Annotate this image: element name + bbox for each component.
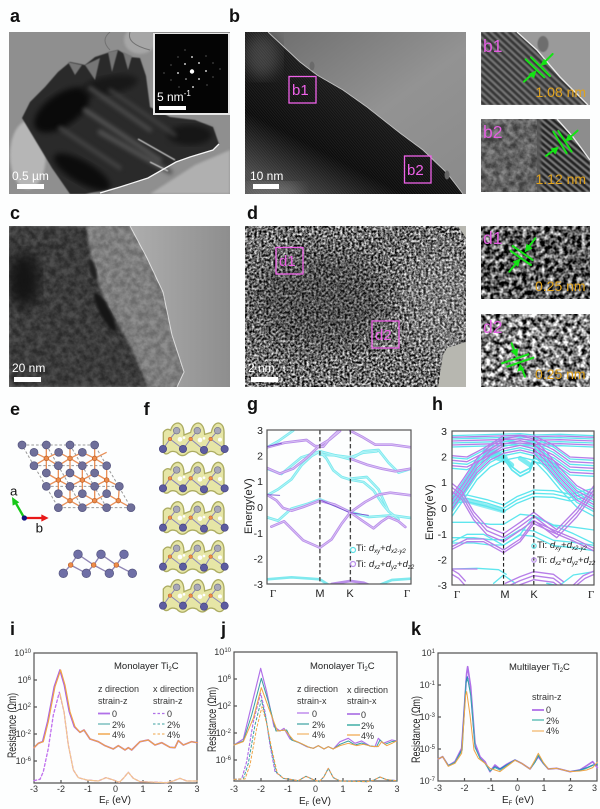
y ticks k: 10 <box>420 680 430 690</box>
x axis label i: E <box>99 795 106 806</box>
orbital legend h: + <box>561 555 567 566</box>
label b1: b1 <box>483 36 502 56</box>
spacing d2: 0.25 nm <box>535 366 586 382</box>
legend k: 2% <box>546 716 559 726</box>
inset b1: lattice fringes <box>481 32 590 105</box>
band plot g <box>268 430 410 584</box>
y ticks j: 2 <box>228 702 232 708</box>
x ticks j: -1 <box>284 784 292 794</box>
y ticks k <box>420 648 436 786</box>
y ticks k: 10 <box>420 712 430 722</box>
y ticks i: 6 <box>28 676 32 682</box>
orbital legend g: Ti: d <box>356 559 374 570</box>
x axis label j: F <box>306 802 310 808</box>
orbital legend g: yz <box>390 565 397 571</box>
x axis label j: E <box>299 796 306 807</box>
energy ticks g: 0 <box>257 502 263 514</box>
inset d1: lattice <box>481 226 590 299</box>
inset scale label: -1 <box>184 89 191 98</box>
y ticks j: 10 <box>224 648 232 654</box>
panel d: high-resolution TEM image <box>245 203 485 387</box>
green fringe marker d1 <box>509 238 535 272</box>
legend k <box>532 692 562 736</box>
x ticks k <box>434 783 597 793</box>
x ticks j: 3 <box>394 784 400 794</box>
x ticks j: -3 <box>230 784 238 794</box>
legend i: 2% <box>167 720 180 730</box>
panel g: monolayer band structure <box>243 394 415 600</box>
orbital legend g: x2-y2 <box>390 549 406 555</box>
y ticks k: -3 <box>430 713 436 719</box>
y axis label i: Resistance (Ωm) <box>5 693 19 758</box>
panel j: resistance monolayer strain-x <box>205 619 400 808</box>
band plot h <box>452 432 594 584</box>
x ticks k: 3 <box>592 783 597 793</box>
x ticks k: -2 <box>460 783 469 793</box>
orbital legend g <box>350 543 415 571</box>
legend i: x direction <box>153 684 194 694</box>
x ticks k: 2 <box>568 783 573 793</box>
region box b1: b1 <box>292 82 309 99</box>
y ticks i: 10 <box>18 702 28 712</box>
panel c: TEM image edge <box>8 203 230 387</box>
energy ticks g <box>254 425 263 591</box>
x ticks i: 2 <box>167 784 173 794</box>
region box b1 <box>289 76 316 103</box>
heading h: h <box>432 394 443 414</box>
title k: Multilayer Ti <box>509 662 560 673</box>
y ticks i: -2 <box>26 730 32 736</box>
x axis label i: (eV) <box>109 795 131 806</box>
label b2: b2 <box>483 122 502 142</box>
x ticks j <box>230 784 400 794</box>
orbital legend h: d <box>567 540 573 551</box>
heading b: b <box>229 6 240 26</box>
y ticks i: 10 <box>14 648 24 658</box>
legend j: 0 <box>312 709 317 719</box>
legend i <box>98 684 194 740</box>
k-path labels h: M <box>500 589 510 601</box>
y ticks k: -5 <box>430 745 436 751</box>
legend i: z direction <box>98 684 139 694</box>
y ticks k: -1 <box>430 681 436 687</box>
scale bar a <box>17 184 44 189</box>
region box b2 <box>404 156 431 183</box>
k-path labels h <box>454 589 594 601</box>
heading f: f <box>144 399 151 419</box>
orbital legend g: d <box>386 559 392 570</box>
y ticks j: 10 <box>218 701 228 711</box>
inset scale label: 5 nm <box>157 90 184 104</box>
energy ticks g: -1 <box>254 528 263 540</box>
x axis label k: F <box>509 801 513 807</box>
curves k <box>438 667 597 772</box>
orbital legend g: z2 <box>407 565 415 571</box>
y ticks k: 10 <box>420 744 430 754</box>
x ticks j: 0 <box>313 784 318 794</box>
axes arrows a and b: a <box>10 484 18 499</box>
legend j: 2% <box>361 721 374 731</box>
energy ticks h: 1 <box>441 477 447 489</box>
energy ticks g: 2 <box>257 450 263 462</box>
energy ticks g: -3 <box>254 579 263 591</box>
x ticks i <box>30 784 200 794</box>
top view lattice <box>18 441 135 512</box>
orbital legend h <box>532 540 596 567</box>
energy ticks g: -2 <box>254 554 263 566</box>
legend k: 4% <box>546 726 559 736</box>
orbital legend g: xy <box>373 549 381 555</box>
legend j: 2% <box>312 720 325 730</box>
image b1 <box>481 32 590 105</box>
y ticks k: 1 <box>432 649 436 655</box>
axes frame g <box>267 430 411 584</box>
x axis label k: (eV) <box>512 795 534 806</box>
inset b2: lattice fringes <box>481 119 590 192</box>
scale bar b <box>253 184 279 189</box>
scale label c: 20 nm <box>12 361 45 375</box>
title i: C <box>172 661 179 672</box>
energy ticks h: -3 <box>438 580 447 592</box>
k-path labels h: K <box>530 589 538 601</box>
k-path labels g: Γ <box>270 588 276 600</box>
orbital legend h: Ti: d <box>537 555 555 566</box>
title i: 2 <box>168 667 172 673</box>
image b2 <box>481 119 590 192</box>
x ticks i: -3 <box>30 784 38 794</box>
axes arrows a and b: b <box>36 520 43 535</box>
x ticks i: -1 <box>84 784 92 794</box>
axes frame k <box>438 653 597 781</box>
orbital legend g: + <box>397 559 403 570</box>
x ticks i: 3 <box>194 784 200 794</box>
energy ticks h: 3 <box>441 426 447 438</box>
x axis label j: (eV) <box>309 796 331 807</box>
region box b2: b2 <box>407 162 424 179</box>
legend i: 4% <box>112 730 125 740</box>
inset scale bar <box>159 106 186 110</box>
legend k: strain-z <box>532 692 562 702</box>
heading c: c <box>10 203 20 223</box>
title i: Monolayer Ti <box>114 661 168 672</box>
scale bar d <box>251 377 278 382</box>
axes frame i <box>34 653 197 783</box>
x ticks k: -3 <box>434 783 442 793</box>
legend j: x direction <box>347 685 388 695</box>
region box d2: d2 <box>375 327 392 344</box>
y ticks k: 10 <box>420 776 430 786</box>
orbital legend h: d <box>567 555 573 566</box>
legend j: strain-x <box>297 696 327 706</box>
x axis label i: F <box>106 801 110 807</box>
energy ticks h: 2 <box>441 452 447 464</box>
heading k: k <box>411 619 422 639</box>
scale label a: 0.5 µm <box>12 169 49 183</box>
x ticks k: 0 <box>515 783 520 793</box>
energy ticks g: 3 <box>257 425 263 437</box>
label d2: d2 <box>483 317 502 337</box>
x ticks j: 2 <box>367 784 373 794</box>
axes arrows a and b <box>10 484 49 535</box>
green fringe marker b1 <box>524 54 553 82</box>
energy axis label h: Energy(eV) <box>424 484 436 540</box>
legend j: strain-x <box>347 696 377 706</box>
TEM image c <box>9 226 230 387</box>
region box d2 <box>372 321 399 348</box>
title j: Monolayer Ti <box>310 661 364 672</box>
y ticks i: 10 <box>16 729 26 739</box>
x ticks i: 1 <box>140 784 146 794</box>
spacing d1: 0.25 nm <box>535 278 586 294</box>
charge density layer 4 <box>159 541 228 573</box>
panel i: resistance monolayer strain-z <box>5 619 200 807</box>
heading g: g <box>247 394 258 414</box>
orbital legend h: z2 <box>588 561 596 567</box>
orbital legend h: d <box>584 555 590 566</box>
energy axis label g: Energy(eV) <box>243 478 255 534</box>
orbital legend h: xz <box>554 561 561 567</box>
orbital legend h: + <box>578 555 584 566</box>
y ticks j: -6 <box>226 756 232 762</box>
legend j <box>297 684 388 741</box>
image d2 <box>481 314 590 387</box>
green fringe marker d2 <box>502 343 533 377</box>
y ticks j: 10 <box>216 755 226 765</box>
TEM image b <box>245 32 466 194</box>
legend k: 0 <box>546 705 551 715</box>
y ticks k: 10 <box>422 648 432 658</box>
TEM image a <box>9 32 230 194</box>
legend i: 0 <box>112 709 117 719</box>
heading d: d <box>247 203 258 223</box>
inset d2: lattice <box>481 314 590 387</box>
x ticks i: 0 <box>113 784 118 794</box>
y ticks i: -6 <box>26 757 32 763</box>
k-path labels g: K <box>346 588 354 600</box>
y ticks j: 10 <box>216 728 226 738</box>
legend i: 0 <box>167 709 172 719</box>
panel h: multilayer band structure <box>424 394 596 601</box>
orbital legend g: xz <box>373 565 380 571</box>
y axis label j: Resistance (Ωm) <box>205 687 219 752</box>
scale label d: 2 nm <box>248 361 275 375</box>
orbital legend g: + <box>380 559 386 570</box>
y ticks i: 10 <box>24 649 32 655</box>
y ticks j: -2 <box>226 729 232 735</box>
heading e: e <box>10 399 20 419</box>
orbital legend g: d <box>403 559 409 570</box>
y ticks j <box>214 647 232 765</box>
panel a: TEM flake with diffraction inset <box>9 6 230 198</box>
energy ticks g: 1 <box>257 476 263 488</box>
region box d1: d1 <box>279 253 296 270</box>
side view structure <box>59 550 137 578</box>
y ticks j: 10 <box>214 647 224 657</box>
y ticks i <box>14 648 32 766</box>
title j: C <box>368 661 375 672</box>
legend j: 0 <box>361 710 366 720</box>
curves i <box>34 670 197 783</box>
axes frame h <box>452 431 594 585</box>
charge density layer 5 <box>159 580 228 612</box>
title k: 2 <box>560 668 564 674</box>
label d1: d1 <box>483 228 502 248</box>
y ticks i: 10 <box>18 675 28 685</box>
energy ticks h: -2 <box>438 554 447 566</box>
orbital legend g: Ti: d <box>356 543 374 554</box>
y ticks j: 6 <box>228 675 232 681</box>
orbital legend h: yz <box>571 561 578 567</box>
energy ticks h: 0 <box>441 503 447 515</box>
y ticks k: -7 <box>430 777 436 783</box>
y ticks i: 2 <box>28 703 32 709</box>
axes frame j <box>234 652 397 781</box>
legend i: strain-z <box>98 696 128 706</box>
k-path labels h: Γ <box>454 589 460 601</box>
x ticks k: -1 <box>487 783 495 793</box>
k-path labels g <box>270 588 410 600</box>
title j: 2 <box>364 667 368 673</box>
heading i: i <box>10 619 15 639</box>
legend i: 2% <box>112 720 125 730</box>
panel k: resistance multilayer <box>409 619 597 807</box>
spacing 1.08 nm: 1.08 nm <box>536 84 586 100</box>
orbital legend g: + <box>380 543 386 554</box>
panel f: charge density stack <box>144 399 228 612</box>
k-path labels h: Γ <box>588 589 594 601</box>
orbital legend h: Ti: d <box>537 540 555 551</box>
k-path labels g: M <box>315 588 325 600</box>
orbital legend g: d <box>386 543 392 554</box>
heading a: a <box>10 6 21 26</box>
panel e: crystal structure <box>10 399 137 578</box>
scale label b: 10 nm <box>250 169 283 183</box>
energy ticks h: -1 <box>438 529 447 541</box>
TEM image d <box>245 226 466 387</box>
region box d1 <box>276 248 303 274</box>
legend j: 4% <box>361 731 374 741</box>
energy ticks h <box>438 426 447 592</box>
y ticks i: 10 <box>16 756 26 766</box>
title k: C <box>563 662 570 673</box>
legend i: 4% <box>167 730 180 740</box>
charge density layer 3 <box>159 502 228 534</box>
x ticks i: -2 <box>57 784 65 794</box>
legend j: z direction <box>297 684 338 694</box>
charge density layer 2 <box>159 462 228 495</box>
scale bar c <box>14 377 41 382</box>
x axis label k: E <box>502 795 509 806</box>
charge density layer 1 <box>159 423 228 456</box>
orbital legend h: x2-y2 <box>571 546 587 552</box>
orbital legend h: + <box>561 540 567 551</box>
legend i: strain-z <box>153 696 183 706</box>
panel b: TEM image with selected regions <box>229 6 466 201</box>
diffraction inset <box>153 33 230 115</box>
orbital legend h: xy <box>554 546 562 552</box>
curves j <box>234 668 397 782</box>
x ticks j: -2 <box>257 784 265 794</box>
heading j: j <box>220 619 226 639</box>
x ticks k: 1 <box>541 783 547 793</box>
k-path labels g: Γ <box>404 588 410 600</box>
image d1 <box>481 226 590 299</box>
legend j: 4% <box>312 730 325 740</box>
y ticks j: 10 <box>218 674 228 684</box>
green fringe marker b2 <box>546 131 578 156</box>
x ticks j: 1 <box>340 784 346 794</box>
y axis label k: Resistance (Ωm) <box>409 696 423 763</box>
spacing 1.12 nm: 1.12 nm <box>536 171 586 187</box>
